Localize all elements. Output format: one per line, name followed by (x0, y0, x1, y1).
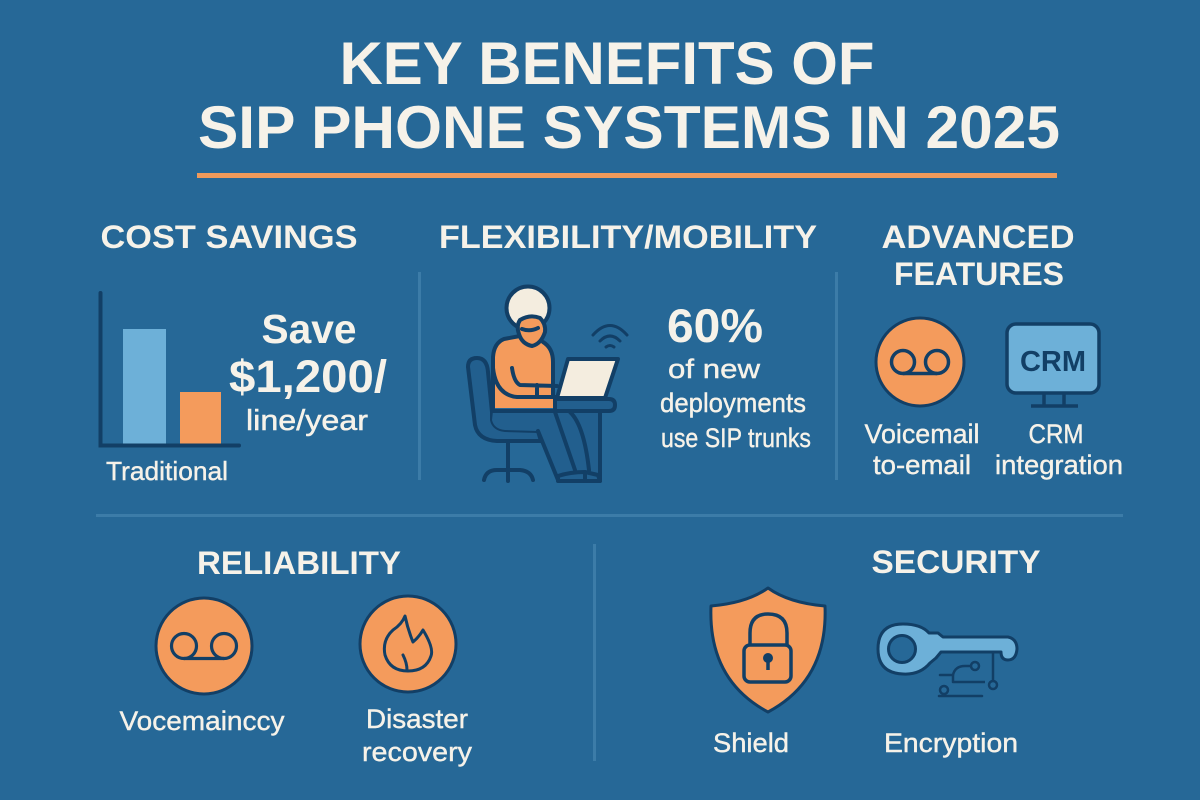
icon: person working on laptop (468, 286, 618, 481)
heading: cost savings: COST SAVINGS (100, 219, 358, 255)
deployment statistic: 60% (667, 299, 763, 352)
shoes (558, 472, 600, 481)
panel: flexibility and mobility (439, 219, 817, 481)
label: disaster recovery: recovery (362, 737, 473, 767)
heading: reliability: RELIABILITY (197, 545, 401, 581)
savings callout: Save (262, 306, 356, 352)
savings callout (229, 306, 388, 437)
label: CRM integration (995, 419, 1123, 480)
icon: shield with padlock (711, 588, 825, 712)
icon: encryption key (878, 624, 1017, 696)
panel: security (711, 544, 1040, 758)
icon: voicemail (876, 318, 964, 406)
title: SIP PHONE SYSTEMS IN 2025 (198, 94, 1060, 161)
laptop (557, 359, 618, 398)
deployment statistic: of new (668, 354, 761, 384)
title (198, 30, 1060, 161)
bar chart (100, 293, 239, 446)
icon: CRM monitor: CRM (1020, 346, 1086, 378)
label: CRM integration: CRM (1028, 419, 1084, 449)
chair (468, 358, 541, 441)
heading: security: SECURITY (872, 544, 1040, 580)
heading: advanced features: FEATURES (894, 256, 1064, 292)
icon: flame (360, 596, 456, 692)
chart label: Traditional (106, 456, 228, 486)
legs (492, 411, 600, 481)
deployment statistic: use SIP trunks (661, 423, 811, 453)
label: voicemail to email: to-email (873, 450, 971, 480)
heading: flexibility and mobility: FLEXIBILITY/MOBILITY (439, 219, 817, 255)
icon: CRM monitor (1007, 324, 1099, 406)
head (506, 286, 550, 330)
label: disaster recovery (362, 704, 473, 767)
label: voicemail to email: Voicemail (864, 419, 980, 449)
torso (493, 336, 553, 408)
label: encryption: Encryption (884, 728, 1018, 758)
savings callout: $1,200/ (229, 351, 388, 402)
label: CRM integration: integration (995, 450, 1123, 480)
deployment statistic: deployments (660, 388, 806, 418)
heading: advanced features: ADVANCED (882, 219, 1074, 255)
label: shield: Shield (713, 728, 789, 758)
savings callout: line/year (246, 405, 368, 437)
deployment statistic (660, 299, 811, 453)
chair base (484, 441, 533, 481)
panel: advanced features (864, 219, 1123, 480)
title: KEY BENEFITS OF (340, 30, 874, 97)
icon: wifi signal (593, 326, 627, 347)
heading: advanced features (882, 219, 1074, 292)
title underline (197, 173, 1057, 178)
panel: reliability (120, 545, 473, 767)
label: vocemainccy: Vocemainccy (120, 706, 285, 736)
icon: voicemail redundancy (156, 598, 252, 694)
label: disaster recovery: Disaster (366, 704, 468, 734)
label: voicemail to email (864, 419, 980, 480)
arm (493, 368, 557, 397)
desk (555, 399, 615, 411)
panel: cost savings (100, 219, 388, 486)
